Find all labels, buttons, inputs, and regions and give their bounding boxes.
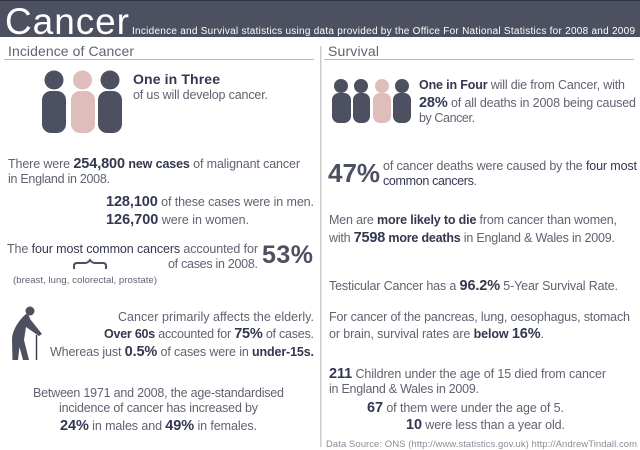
subtitle: Incidence and Survival statistics using data provided by the Office For National Statistics for 2008 and 2009	[132, 26, 635, 37]
children text: 10 were less than a year old.	[406, 417, 565, 433]
four most common cancers: of cases in 2008.	[168, 257, 258, 271]
children text: 211 Children under the age of 15 died from cancer	[329, 366, 606, 382]
deaths text: common cancers.	[383, 174, 477, 188]
stat: 53%: 53%	[262, 241, 313, 269]
stat: 47%: 47%	[328, 158, 380, 188]
new cases text: There were 254,800 new cases of malignant cancer	[8, 156, 300, 172]
increase text: incidence of cancer has increased by	[59, 401, 259, 415]
elderly text: Cancer primarily affects the elderly.	[118, 310, 314, 324]
men more likely text	[328, 213, 617, 246]
men and women cases: 128,100 of these cases were in men.	[106, 194, 314, 210]
data source: Data Source: ONS (http://www.statistics.gov.uk) http://AndrewTindall.com	[326, 439, 637, 450]
children text: 67 of them were under the age of 5.	[367, 400, 564, 416]
other cancers text: For cancer of the pancreas, lung, oesophagus, stomach	[329, 310, 630, 324]
children text: in England & Wales in 2009.	[329, 382, 479, 396]
one in three text: of us will develop cancer.	[133, 88, 268, 102]
header banner	[0, 0, 640, 42]
title: Cancer	[5, 1, 129, 42]
one in four text: One in Four will die from Cancer, with	[419, 78, 625, 92]
one in four text: by Cancer.	[419, 111, 475, 125]
brace	[74, 260, 106, 269]
four most common cancers	[7, 241, 313, 286]
other cancers text: or brain, survival rates are below 16%.	[329, 326, 544, 342]
other cancers text	[329, 310, 630, 342]
one in three text: One in Three	[133, 71, 220, 87]
deaths text: of cancer deaths were caused by the four most	[383, 159, 638, 173]
new cases text	[8, 156, 300, 186]
increase text: 24% in males and 49% in females.	[60, 418, 257, 434]
new cases text: in England in 2008.	[8, 172, 110, 186]
deaths text	[383, 159, 638, 188]
icon: one in four people	[332, 79, 411, 123]
heading: survival: Survival	[328, 43, 379, 59]
men and women cases	[106, 194, 314, 228]
elderly text	[50, 310, 314, 360]
testicular text: Testicular Cancer has a 96.2% 5-Year Survival Rate.	[329, 278, 618, 294]
increase text	[33, 386, 284, 434]
heading: incidence: Incidence of Cancer	[8, 43, 134, 59]
icon: one in three people	[42, 70, 122, 133]
men and women cases: 126,700 were in women.	[106, 212, 249, 228]
men more likely text: with 7598 more deaths in England & Wales in 2009.	[328, 230, 615, 246]
elderly text: Whereas just 0.5% of cases were in under-15s.	[50, 344, 314, 360]
one in four text	[419, 78, 636, 125]
men more likely text: Men are more likely to die from cancer than women,	[329, 213, 617, 227]
elderly text: Over 60s accounted for 75% of cases.	[104, 326, 314, 342]
one in three text	[133, 71, 268, 102]
icon: elderly person	[12, 306, 42, 360]
panel: incidence of cancer	[4, 43, 314, 434]
cancer list: (breast, lung, colorectal, prostate)	[13, 275, 157, 286]
four most common cancers: The four most common cancers accounted for	[7, 242, 258, 256]
children text	[329, 366, 606, 433]
panel: survival	[324, 43, 638, 433]
increase text: Between 1971 and 2008, the age-standardised	[33, 386, 284, 400]
one in four text: 28% of all deaths in 2008 being caused	[419, 95, 636, 111]
